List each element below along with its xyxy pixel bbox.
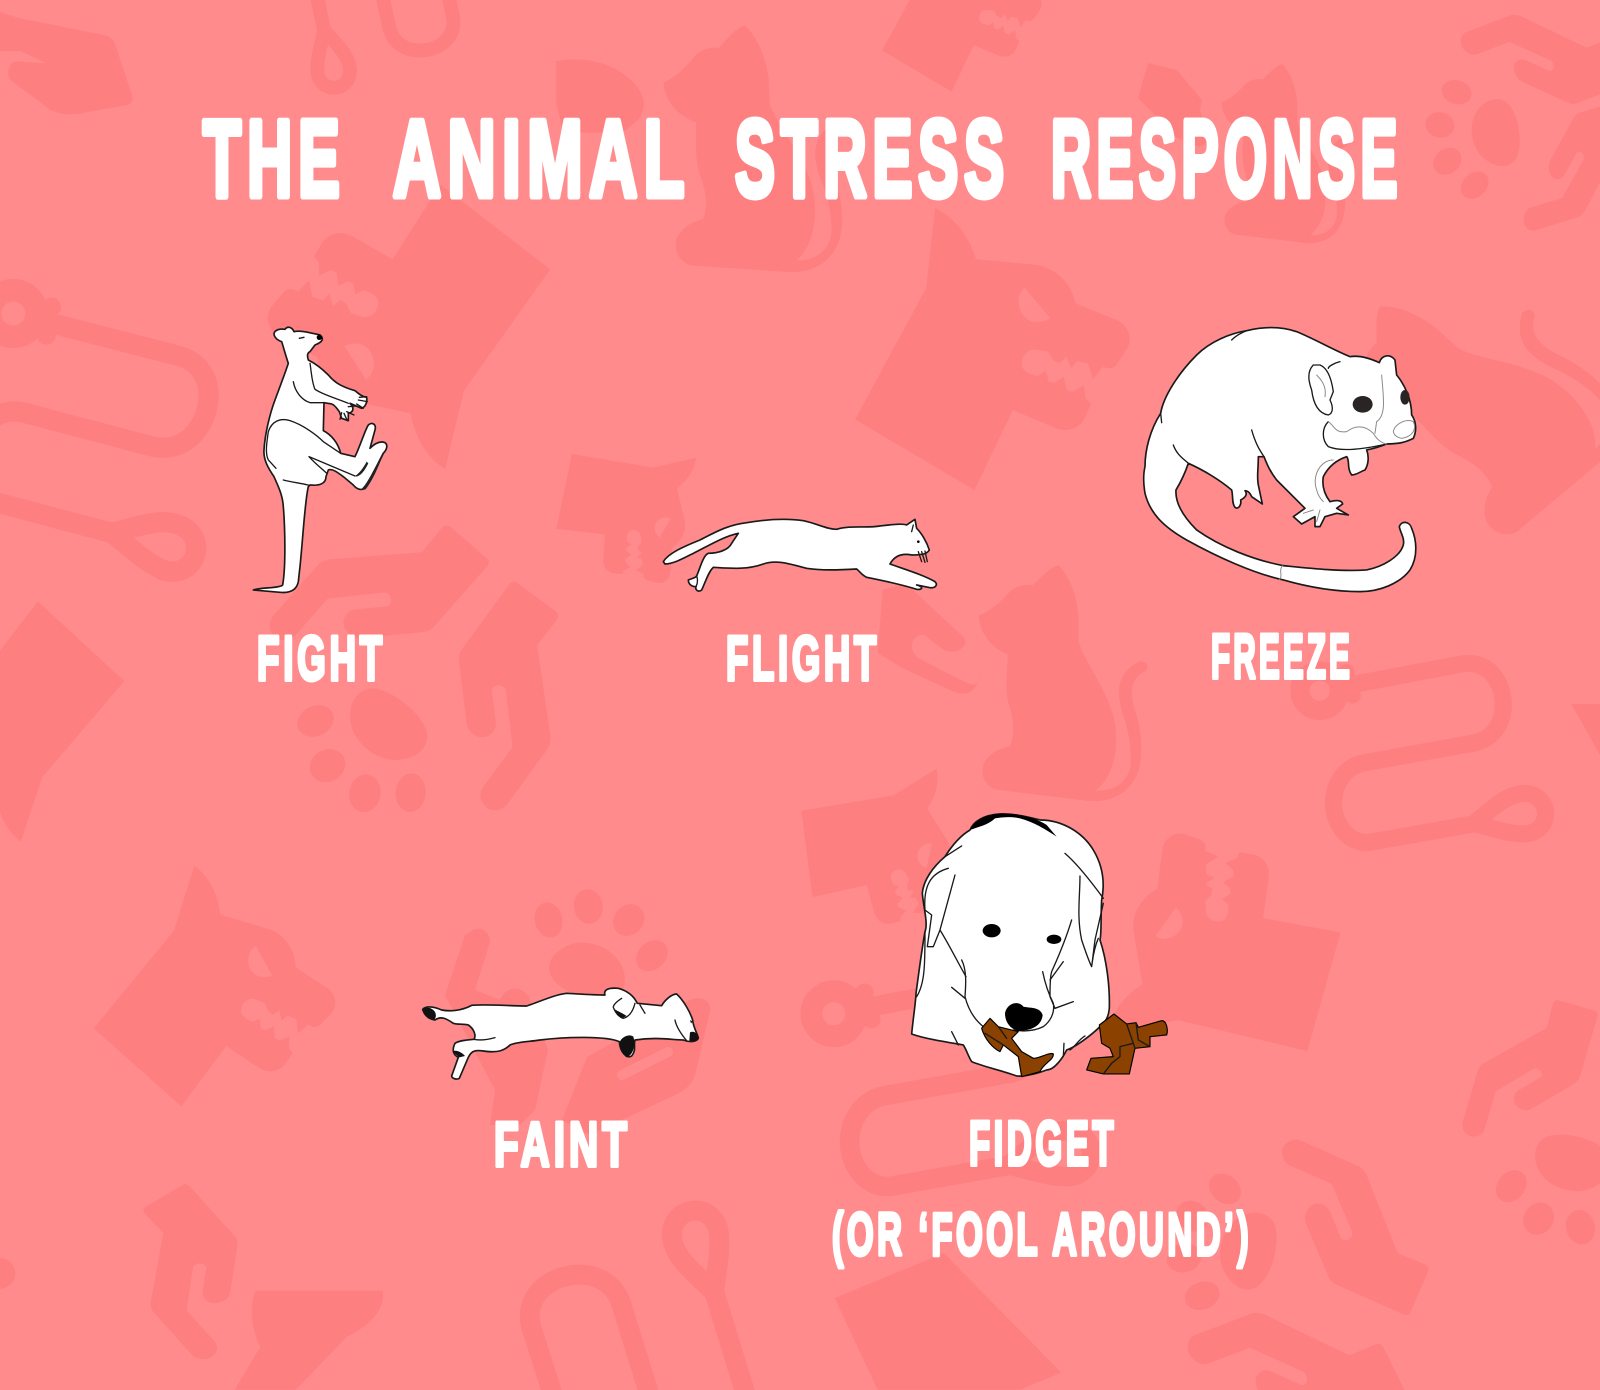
icon: dog chewing toy xyxy=(912,813,1167,1077)
title: THE xyxy=(203,98,346,220)
icon: kangaroo xyxy=(253,327,387,592)
panel: freeze xyxy=(1144,328,1416,692)
panel: flight xyxy=(663,519,936,694)
panel: fidget xyxy=(832,813,1252,1268)
panel: fight xyxy=(253,327,387,694)
label: fight: FIGHT xyxy=(257,624,386,694)
title: STRESS xyxy=(735,98,1010,220)
panel: faint xyxy=(423,988,698,1180)
icon: running cat xyxy=(663,519,936,591)
icon: fainted dog xyxy=(423,988,698,1079)
icon: opossum xyxy=(1144,328,1416,592)
label: faint: FAINT xyxy=(494,1110,631,1180)
label: flight: FLIGHT xyxy=(726,624,880,694)
title: ANIMAL xyxy=(393,98,691,220)
background silhouettes behind faint dog and title xyxy=(445,63,1210,1135)
panel: freeze: FREEZE xyxy=(1211,622,1353,692)
title xyxy=(203,98,1403,220)
label: or fool around: (OR ‘FOOL AROUND’) xyxy=(832,1201,1252,1268)
label: fidget: FIDGET xyxy=(969,1109,1117,1179)
